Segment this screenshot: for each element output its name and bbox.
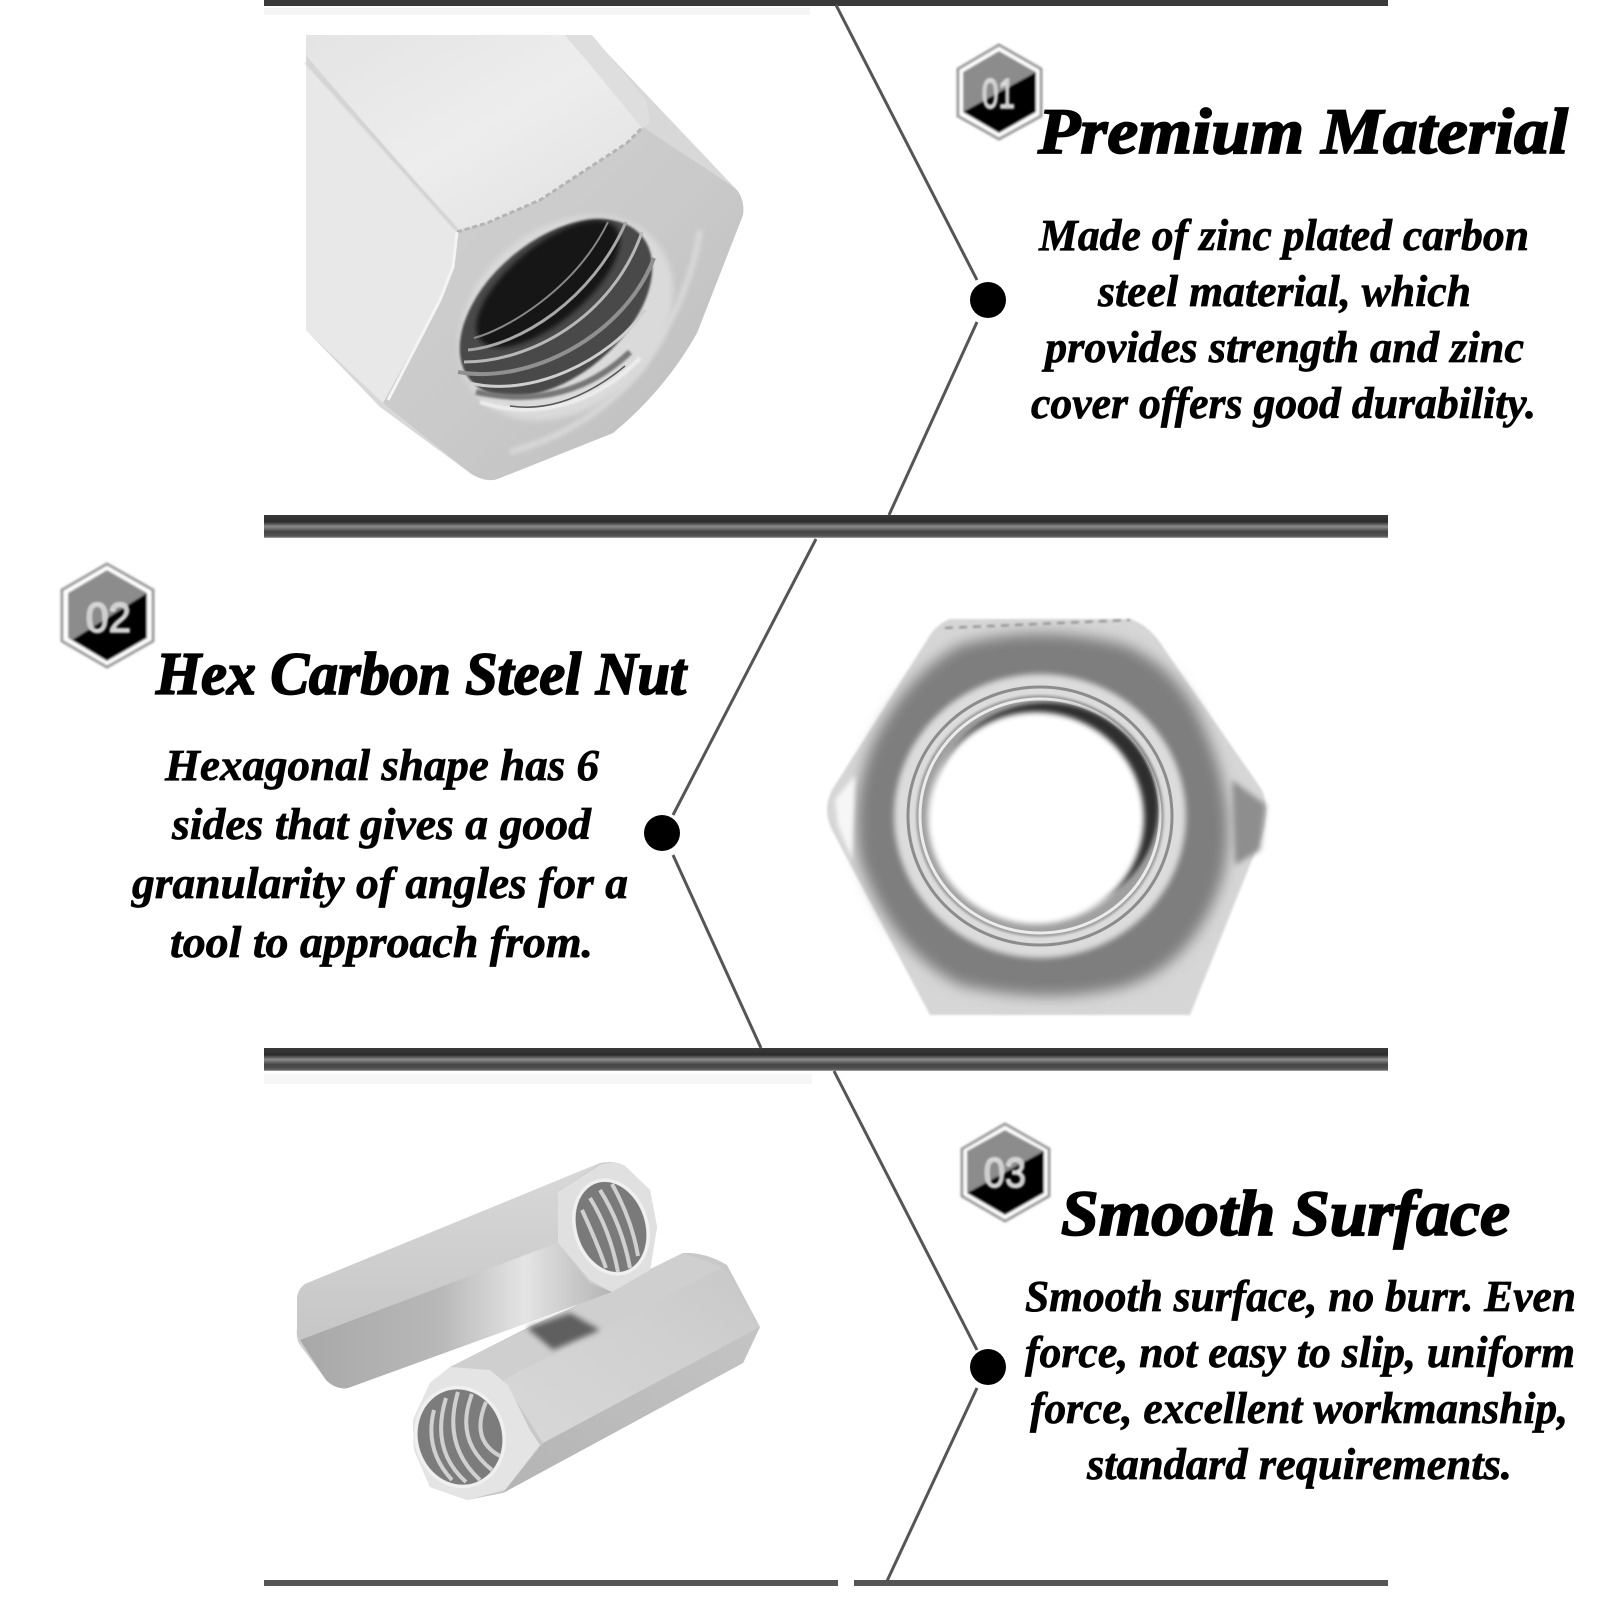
connector line: section 1 lower [889, 322, 977, 515]
heading: Premium Material: Premium Material [1037, 96, 1568, 168]
photo: two coupling nuts [297, 1162, 760, 1500]
badge 02: 02 [86, 594, 131, 641]
text block: smooth surface description [1025, 1272, 1576, 1489]
badge 03: 03 [984, 1149, 1026, 1196]
connector line: section 3 upper [834, 1071, 977, 1350]
text block: premium material description: cover offers good durability. [1031, 379, 1536, 428]
badge 03 [962, 1124, 1049, 1221]
photo: coupling nut close-up [306, 35, 743, 480]
dot: section 2 [644, 815, 680, 851]
photo: hex nut front view [827, 619, 1266, 1015]
badge 01 [958, 45, 1041, 139]
text block: hex nut description: Hexagonal shape has 6 [164, 741, 599, 790]
dot: section 3 [970, 1349, 1006, 1385]
badge 02 [62, 564, 153, 667]
middle divider bar 2 [264, 1048, 1388, 1071]
connector line: section 3 lower [887, 1388, 977, 1581]
heading: Hex Carbon Steel Nut: Hex Carbon Steel Nut [155, 641, 688, 707]
text block: premium material description: steel material, which [1097, 267, 1471, 316]
text block: smooth surface description: Smooth surface, no burr. Even [1025, 1272, 1576, 1321]
top divider bar [264, 0, 1388, 6]
badge 01: 01 [982, 70, 1015, 117]
text block: hex nut description: sides that gives a good [171, 800, 592, 849]
text block: hex nut description: granularity of angles for a [131, 859, 628, 908]
text block: premium material description: Made of zinc plated carbon [1038, 211, 1529, 260]
bottom divider bar right [854, 1580, 1388, 1586]
connector line: section 2 upper [673, 539, 816, 815]
text block: premium material description: provides strength and zinc [1041, 323, 1524, 372]
middle divider bar 1 [264, 515, 1388, 538]
lower nut [405, 1253, 760, 1500]
text block: hex nut description [131, 741, 628, 967]
connector line: section 2 lower [673, 855, 761, 1048]
text block: smooth surface description: force, not easy to slip, uniform [1025, 1328, 1575, 1377]
text block: smooth surface description: force, excellent workmanship, [1030, 1384, 1568, 1433]
text block: premium material description [1031, 211, 1536, 428]
text block: smooth surface description: standard requirements. [1086, 1440, 1512, 1489]
dot: section 1 [970, 282, 1006, 318]
text block: hex nut description: tool to approach from. [170, 918, 593, 967]
upper nut [297, 1162, 660, 1388]
heading: Smooth Surface: Smooth Surface [1061, 1178, 1510, 1250]
connector line: section 1 [836, 5, 977, 280]
bottom divider bar left [264, 1580, 838, 1586]
